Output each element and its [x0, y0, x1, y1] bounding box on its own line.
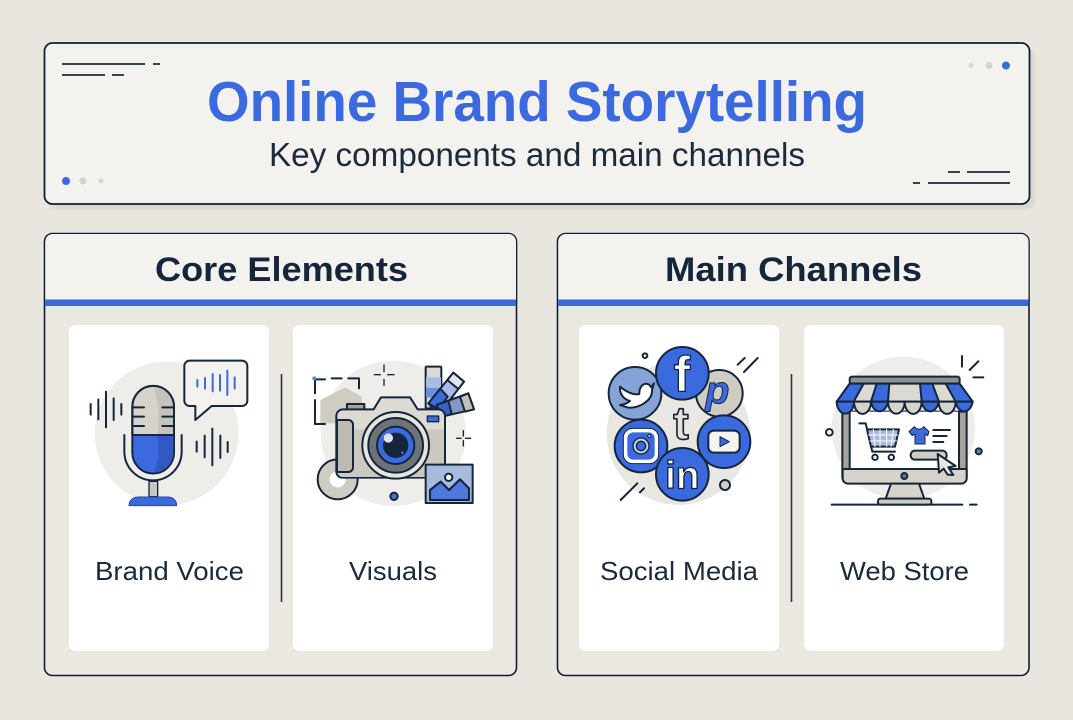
icon: camera [312, 361, 474, 506]
icon: social media cluster [607, 346, 758, 505]
icon: social media cluster: t [673, 397, 689, 449]
awning [850, 377, 960, 384]
icon: social media cluster: in [665, 454, 700, 497]
icon: microphone [91, 361, 247, 506]
heading: main channels: Main Channels [665, 251, 922, 289]
card: visuals [293, 325, 493, 651]
swatches [426, 367, 441, 408]
icon: web store [826, 356, 983, 505]
title: Online Brand Storytelling [207, 70, 867, 134]
panel: core elements [44, 234, 516, 676]
label: social media: Social Media [600, 556, 759, 586]
label: web store: Web Store [840, 556, 969, 586]
subtitle: Key components and main channels [269, 136, 805, 173]
card: social media [579, 325, 779, 651]
label: brand voice: Brand Voice [95, 556, 244, 586]
panel: main channels [558, 234, 1029, 676]
icon: social media cluster: f [674, 346, 691, 402]
shirt [909, 427, 929, 444]
icon: social media cluster: p [704, 368, 729, 412]
heading: core elements: Core Elements [155, 251, 408, 289]
card: brand voice [69, 325, 269, 651]
label: visuals: Visuals [349, 556, 437, 586]
title banner [44, 43, 1035, 209]
picture [426, 465, 473, 503]
card: web store [804, 325, 1004, 651]
cart [859, 423, 895, 452]
